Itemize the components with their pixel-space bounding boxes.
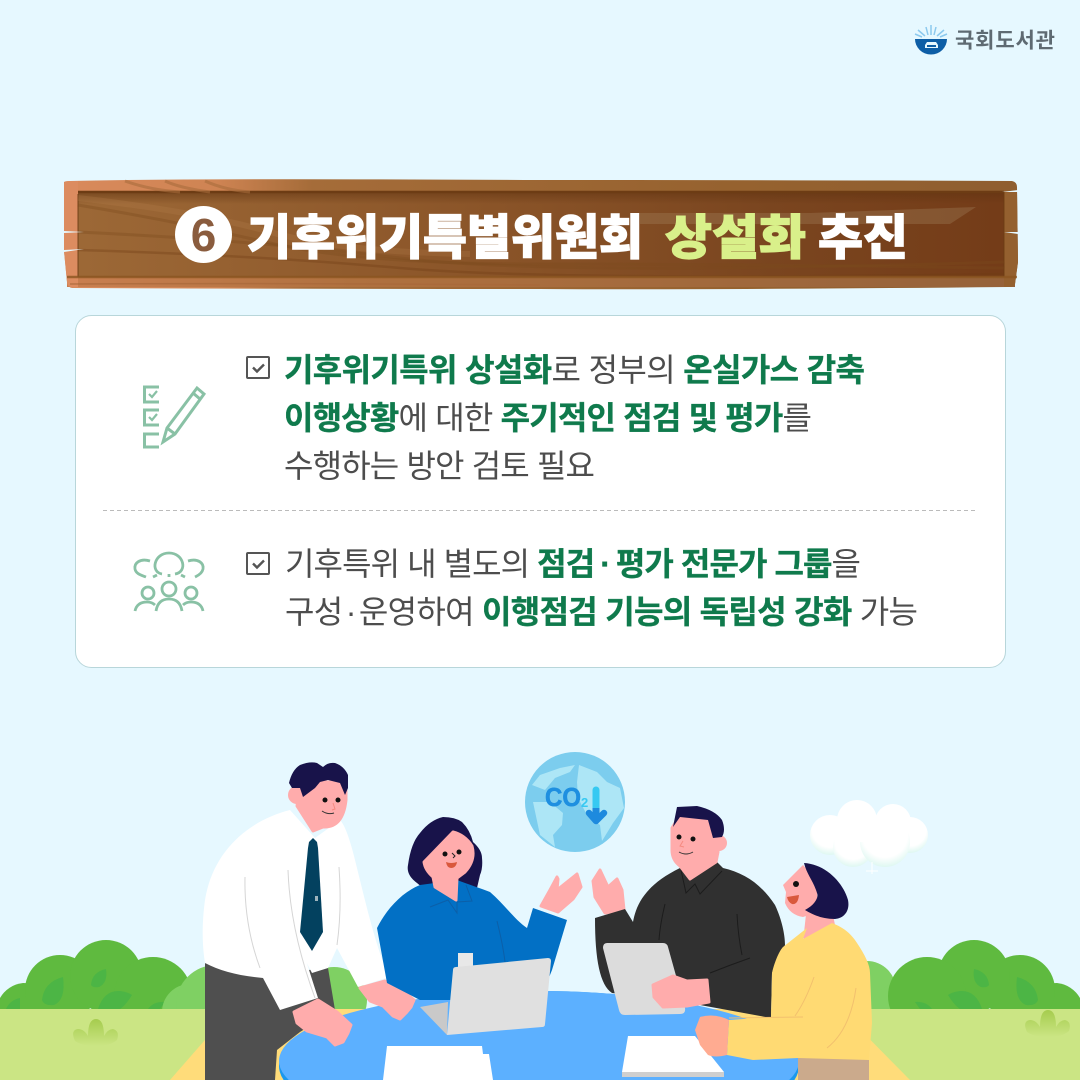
notebook [622, 1036, 724, 1077]
ground [0, 1009, 1080, 1080]
fist [695, 1016, 729, 1056]
person: man in white shirt [203, 762, 414, 1080]
logo text: 국회도서관 [955, 30, 1055, 52]
neck [803, 905, 835, 942]
title text [247, 212, 908, 265]
icon: checkbox [247, 553, 269, 574]
number badge [175, 206, 232, 263]
text block: item 1 [284, 352, 865, 484]
wood plank [64, 179, 1018, 289]
shirt [377, 880, 567, 1000]
illustration: landscape [0, 940, 1080, 1080]
title banner: wood sign [64, 179, 1018, 289]
hair [408, 817, 482, 908]
grass tufts [73, 1010, 1070, 1046]
title text: 기후위기특별위원회 [247, 212, 643, 265]
tie [300, 838, 323, 951]
raised hand [593, 870, 624, 913]
hands [294, 1000, 351, 1045]
globe: CO2 reduction: CO [545, 782, 581, 812]
globe: CO2 reduction [525, 752, 625, 852]
person: woman in yellow [695, 863, 872, 1080]
item 2 [247, 546, 918, 630]
path [170, 1009, 910, 1080]
bushes right [838, 940, 1080, 1036]
text block: item 1: 이행상황에 대한 주기적인 점검 및 평가를 [284, 400, 812, 436]
title text: 상설화 [665, 212, 806, 265]
meeting table [279, 991, 799, 1080]
item 1 [247, 352, 865, 484]
title text: 추진 [818, 212, 908, 265]
text block: item 2: 구성 · 운영하여 이행점검 기능의 독립성 강화 가능 [285, 594, 918, 630]
hand [653, 976, 709, 1007]
head [672, 815, 718, 879]
icon: discussion group [135, 553, 203, 611]
icon: library emblem [915, 25, 947, 54]
raised hand [541, 874, 581, 912]
person: woman in blue shirt [377, 817, 581, 1000]
cloud [810, 800, 928, 874]
laptop [420, 953, 551, 1035]
trousers [205, 963, 335, 1080]
text block: item 1: 기후위기특위 상설화로 정부의 온실가스 감축 [284, 352, 865, 388]
face [424, 832, 473, 900]
icon: checkbox [247, 357, 269, 378]
trousers [798, 1056, 869, 1080]
logo: 국회도서관 [915, 25, 1055, 54]
tablet [603, 943, 685, 1015]
bushes left [0, 940, 367, 1045]
text block: item 1: 수행하는 방안 검토 필요 [284, 448, 595, 484]
text block: item 2: 기후특위 내 별도의 점검 · 평가 전문가 그룹을 [285, 546, 861, 582]
icon: checklist and pencil [144, 387, 204, 447]
shirt [595, 860, 785, 1018]
shirt [203, 810, 389, 1010]
face [783, 865, 818, 917]
number badge: 6 [191, 209, 216, 261]
plank cracks [64, 190, 1018, 252]
cardigan [727, 923, 872, 1060]
globe: CO2 reduction: 2 [581, 795, 588, 810]
text block: item 2 [285, 546, 918, 630]
paper stack [383, 1046, 493, 1080]
hair [804, 863, 848, 919]
person: man in black shirt [593, 806, 785, 1018]
head [297, 782, 346, 831]
grain [67, 181, 1017, 285]
panel: content card [76, 316, 1006, 668]
